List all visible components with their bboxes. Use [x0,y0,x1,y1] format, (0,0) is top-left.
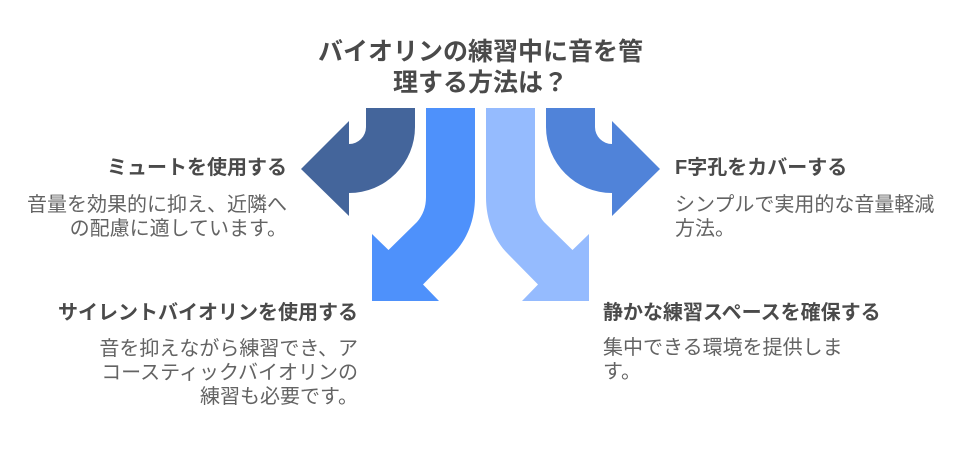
description: quiet space: す。 [603,361,641,383]
description: quiet space: 集中できる環境を提供しま [603,337,843,359]
heading: mute: ミュートを使用する [107,157,287,179]
text block: silent violin [58,302,358,408]
description: f-hole cover: 方法。 [675,218,735,240]
text block: mute [27,156,287,240]
description: f-hole cover: シンプルで実用的な音量軽減 [675,194,934,216]
description: f-hole cover [675,194,934,240]
text block: f-hole cover [675,156,934,240]
arrow: f-hole cover (mid blue, right) [546,108,660,216]
description: mute: 音量を効果的に抑え、近隣へ [27,194,287,216]
description: silent violin [99,338,358,408]
arrow: mute (dark blue, left) [301,108,415,216]
text block: quiet space [603,302,881,383]
description: silent violin: 練習も必要です。 [200,386,358,408]
arrow: silent violin (blue, down-left) [372,108,475,301]
description: silent violin: コースティックバイオリンの [101,362,358,384]
title: 理する方法は？ [393,69,568,97]
description: mute [27,194,287,240]
description: mute: の配慮に適しています。 [70,218,287,240]
description: quiet space [603,337,843,383]
description: silent violin: 音を抑えながら練習でき、ア [99,338,358,360]
heading: f-hole cover: F字孔をカバーする [675,157,847,179]
heading: quiet space: 静かな練習スペースを確保する [603,302,881,324]
title [318,38,643,97]
title: バイオリンの練習中に音を管 [318,38,643,66]
arrow: quiet space (light blue, down-right) [486,108,589,301]
heading: silent violin: サイレントバイオリンを使用する [58,302,358,324]
